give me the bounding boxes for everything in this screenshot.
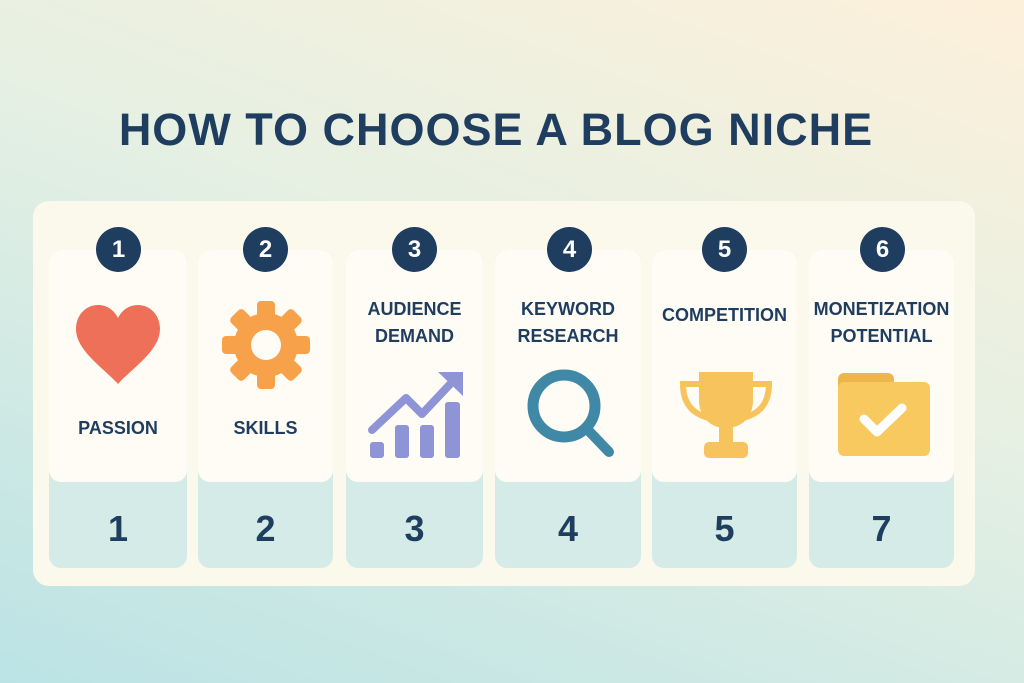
label: audience demand [367,299,462,346]
panel: steps container [33,201,975,586]
card 3: audience demand [346,250,483,568]
badge 2: 2 [259,236,272,263]
card 6: monetization [809,250,954,568]
label: competition: COMPETITION [662,305,787,325]
card 1: passion [49,250,187,568]
label: audience demand: AUDIENCE [367,299,462,319]
card 1: passion: 1 [108,508,128,549]
badge 6 [860,227,905,272]
icon: trophy [680,372,772,458]
card 4: keyword research [495,250,641,568]
badge 3: 3 [408,236,421,263]
label: keyword research: KEYWORD [521,299,615,319]
badge 2 [243,227,288,272]
badge 3 [392,227,437,272]
badge 1 [96,227,141,272]
badge 5: 5 [718,236,731,263]
label: audience demand: DEMAND [375,326,454,346]
icon: growth chart [368,372,463,458]
icon: folder check [838,373,930,456]
badge 1: 1 [112,236,125,263]
card 3: audience demand: 3 [404,508,425,549]
title: HOW TO CHOOSE A BLOG NICHE [119,104,873,155]
card 4: keyword research: 4 [558,508,578,549]
card 5: competition [652,250,797,568]
label: passion: PASSION [78,418,158,438]
badge 5 [702,227,747,272]
card 2: skills [198,250,333,568]
badge 4: 4 [563,236,576,263]
icon: heart [76,305,160,384]
label: keyword research [517,299,618,346]
badge 6: 6 [876,236,889,263]
label: keyword research: RESEARCH [517,326,618,346]
label: monetization potential: POTENTIAL [830,326,932,346]
card 2: skills: 2 [255,508,276,549]
label: monetization potential: MONETIZATION [814,299,949,319]
card 5: competition: 5 [714,508,735,549]
label: skills: SKILLS [233,418,298,438]
icon: gear [222,301,310,389]
icon: magnifier [528,370,614,457]
badge 4 [547,227,592,272]
label: monetization potential [814,299,949,346]
card 6: monetization: 7 [871,508,892,549]
